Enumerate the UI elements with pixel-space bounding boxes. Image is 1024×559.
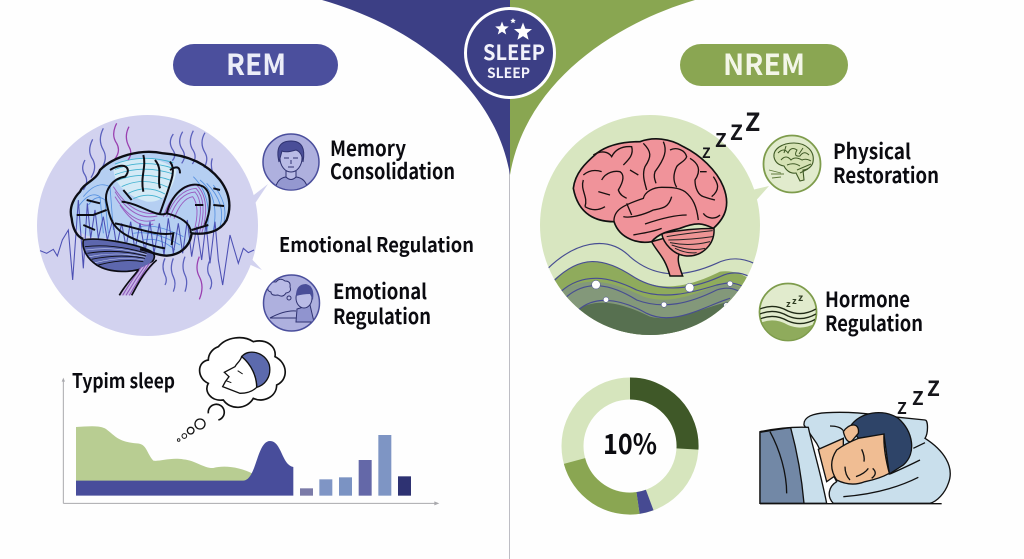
text: memory consolidation: Memory: [330, 133, 406, 163]
icon: sleeping person: [760, 412, 950, 504]
brain body: [573, 139, 727, 242]
top banner: green half: [510, 0, 695, 175]
cerebellum: [662, 228, 714, 256]
top banner: blue half: [322, 0, 510, 175]
icon: hormone regulation waves: z: [792, 294, 797, 307]
brain fill: [71, 152, 229, 256]
axes: [63, 380, 437, 503]
green area: [76, 426, 253, 482]
dense blue wave bars: [40, 200, 254, 285]
icon: emotional thought person: [264, 275, 320, 331]
donut chart: 10%: [572, 388, 688, 504]
icon: zzz over brain: Z: [715, 126, 727, 153]
brain inner contour lines: [115, 158, 173, 199]
text: emotional regulation: [333, 276, 431, 331]
icon: zzz over brain: Z: [702, 143, 711, 163]
donut chart: 10%: 10%: [603, 423, 657, 463]
icon: stars: [495, 18, 532, 40]
text: hormone regulation: Regulation: [825, 308, 923, 338]
text: physical restoration: [833, 136, 939, 190]
brain outline: [71, 152, 229, 256]
blanket: [760, 427, 827, 503]
REM heading pill: [173, 42, 338, 86]
icon: physical restoration brain: [764, 136, 820, 192]
icon: hormone regulation waves: [760, 284, 816, 343]
icon: zzz over sleeper: Z: [912, 384, 924, 411]
icon: hormone regulation waves: z: [786, 297, 791, 310]
icon: dream thought bubble: [177, 338, 285, 441]
text: emotional regulation: Regulation: [333, 301, 431, 331]
icon: zzz over sleeper: Z: [927, 373, 940, 403]
panel: REM brain illustration: [37, 115, 268, 336]
hair: [850, 413, 912, 474]
center sleep badge: SLEEP: [483, 37, 545, 67]
icon: zzz over sleeper: [897, 373, 940, 419]
pillow fold: [830, 426, 925, 497]
text: memory consolidation: Consolidation: [330, 156, 455, 186]
neck: [818, 438, 843, 482]
brainstem: [119, 260, 157, 295]
icon: hormone regulation waves: z: [798, 289, 803, 304]
icon: zzz over brain: Z: [730, 117, 743, 147]
chart: typical sleep: [62, 365, 439, 505]
face: [832, 434, 889, 484]
NREM heading pill: [680, 42, 848, 86]
text: emotional regulation: Emotional: [333, 276, 427, 306]
text: memory consolidation: [330, 133, 455, 186]
center sleep badge: SLEEP: [487, 63, 530, 83]
sleep waves: [554, 262, 747, 335]
text: hormone regulation: Hormone: [825, 284, 910, 314]
panel: NREM brain illustration: [540, 115, 769, 340]
text: physical restoration: Physical: [833, 136, 911, 166]
text: physical restoration: Restoration: [833, 160, 939, 190]
icon: zzz over brain: Z: [745, 103, 760, 139]
text: hormone regulation: [825, 284, 923, 338]
icon: memory person: [263, 134, 319, 190]
icon: zzz over sleeper: Z: [897, 395, 907, 419]
NREM heading pill: NREM: [723, 42, 805, 84]
REM heading pill: REM: [226, 42, 286, 84]
text: emotional regulation heading: Emotional Regulation: [279, 229, 474, 258]
cerebellum: [83, 239, 154, 271]
center sleep badge: [466, 8, 554, 98]
pillow: [804, 412, 950, 503]
blue area: [76, 441, 293, 496]
wavy lines top: [83, 128, 212, 292]
icon: zzz over brain: [702, 103, 760, 163]
bars: [300, 488, 313, 496]
chart: typical sleep: Typim sleep: [72, 365, 175, 394]
brainstem: [652, 237, 683, 276]
